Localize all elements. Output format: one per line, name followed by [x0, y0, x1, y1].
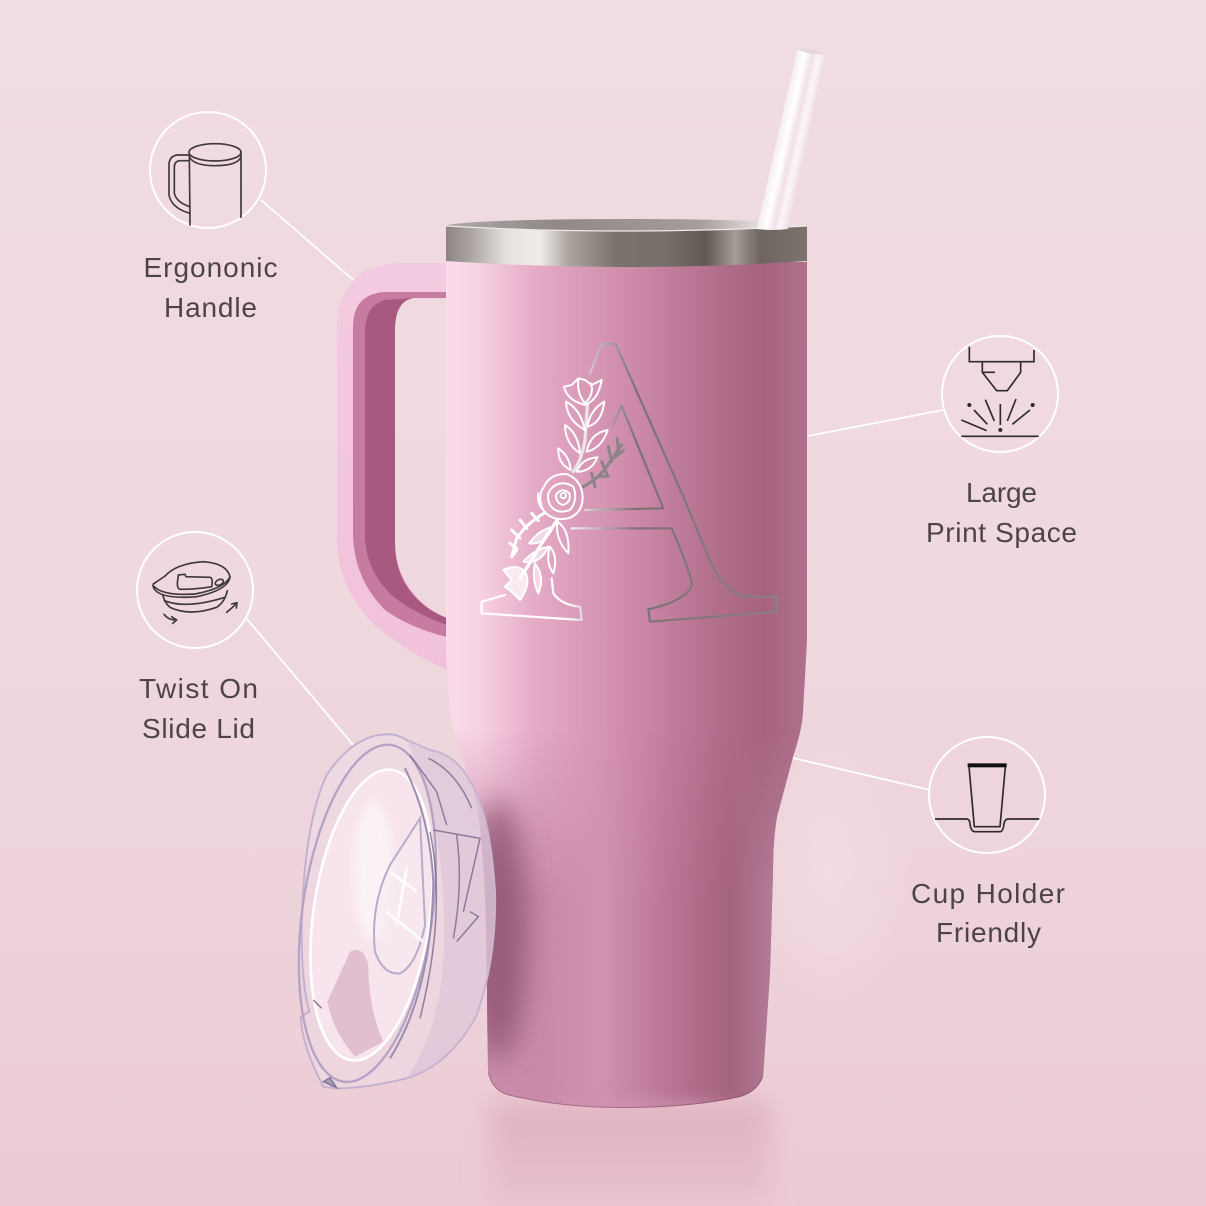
straw base overlay: [757, 200, 792, 230]
lid ring shade: [390, 768, 433, 1058]
left sprig: [512, 513, 545, 557]
icon: mug with handle: [169, 144, 241, 225]
lid side band: [407, 740, 495, 1078]
icon ring: [929, 737, 1045, 853]
callout: twist on slide lid: [137, 532, 258, 744]
leader line: large print space: [808, 410, 943, 436]
lid slider ribs: [387, 868, 423, 942]
lid outer ring: [279, 736, 455, 1091]
tumbler handle: [337, 263, 447, 670]
icon: laser engraver: [961, 347, 1039, 436]
transparent lid: [279, 734, 495, 1091]
icon ring: [942, 336, 1058, 452]
label: Ergononic: [144, 252, 278, 283]
letter A outline: [572, 344, 777, 622]
leader line: ergonomic handle: [261, 200, 358, 284]
icon ring: [150, 112, 266, 228]
lower branch: [520, 520, 557, 578]
rose: [540, 474, 583, 519]
label: Large: [966, 477, 1037, 508]
label line two: Slide Lid: [142, 713, 255, 744]
letter A counter: [585, 406, 663, 510]
leader line: cup holder friendly: [793, 758, 930, 790]
tumbler body: [446, 262, 807, 1108]
lid outer silhouette: [301, 734, 495, 1088]
label line two: Friendly: [936, 917, 1041, 948]
callout: large print space: [926, 336, 1077, 548]
lid tab detail: [313, 1000, 337, 1088]
icon: lid with twist arrows: [153, 562, 237, 623]
lid threads and details: [410, 755, 480, 1018]
tumbler steel rim: [446, 219, 807, 267]
straw: [757, 49, 825, 228]
icon ring: [137, 532, 253, 648]
label line two: Handle: [164, 292, 257, 323]
letter A left serif: [482, 578, 582, 620]
leader line: twist on slide lid: [247, 619, 354, 746]
label line two: Print Space: [926, 517, 1077, 548]
lid reflection: [327, 950, 383, 1057]
right sprig: [583, 438, 623, 487]
lid front ring: [293, 762, 450, 1068]
label: Twist On: [139, 673, 258, 704]
callout: cup holder friendly: [911, 737, 1065, 948]
callout: ergonomic handle: [144, 112, 278, 323]
engraved letter A with floral: [482, 344, 777, 622]
floral stem and leaves: [503, 378, 608, 600]
lid glare: [353, 802, 393, 942]
icon: cup in holder: [935, 763, 1039, 832]
label: Cup Holder: [911, 878, 1065, 909]
lid slider window: [374, 818, 425, 973]
